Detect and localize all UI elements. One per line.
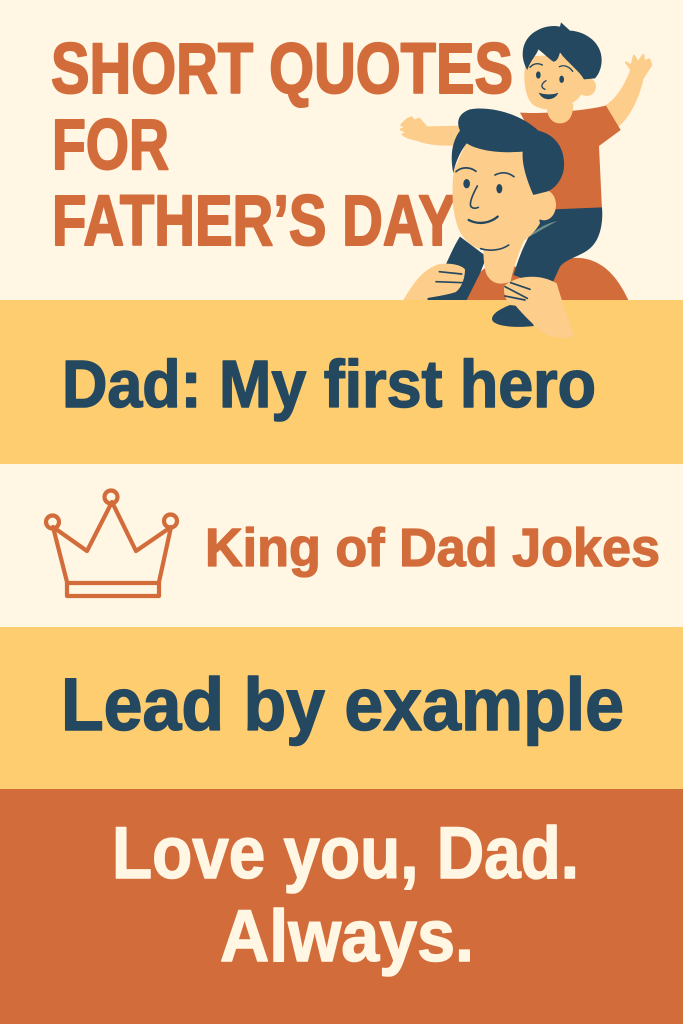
illustration overlap: child's foot and father's right hand: [492, 277, 574, 338]
child's neck: [547, 103, 573, 123]
child's shirt: [520, 106, 621, 210]
father's face details: [456, 168, 514, 250]
quote 3: Lead by example: [61, 663, 624, 746]
father's shoulders and shirt: [466, 258, 628, 300]
illustration: father carrying child on shoulders: [401, 22, 651, 300]
father's hair: [452, 109, 564, 195]
title: SHORT QUOTES: [51, 30, 513, 109]
father's left hand: [403, 264, 465, 300]
father's neck: [483, 230, 530, 284]
highlight on child's leg: [528, 221, 557, 237]
child's near arm: [605, 55, 651, 127]
title: FOR: [52, 106, 169, 185]
quote 1: Dad: My first hero: [62, 347, 596, 422]
icon: crown: [46, 490, 177, 596]
panel: quote band 3: [0, 627, 683, 789]
child's face: [524, 53, 585, 109]
child's ear: [577, 77, 596, 96]
child's face details: [530, 64, 573, 89]
title: [51, 30, 513, 261]
panel: quote band 1: [0, 300, 683, 464]
father's face: [452, 142, 540, 251]
title: FATHER’S DAY: [52, 182, 456, 261]
panel: closing band: [0, 789, 683, 1024]
panel: header background: [0, 0, 683, 301]
child's legs: [513, 207, 602, 288]
closing quote: Always.: [220, 896, 474, 977]
panel: quote band 2: [0, 464, 683, 627]
closing quote: [112, 813, 579, 977]
closing quote: Love you, Dad.: [112, 813, 579, 894]
father's ear: [532, 190, 556, 220]
quote 2: King of Dad Jokes: [205, 518, 660, 578]
child's far arm: [401, 117, 460, 145]
child's hair: [523, 22, 602, 79]
